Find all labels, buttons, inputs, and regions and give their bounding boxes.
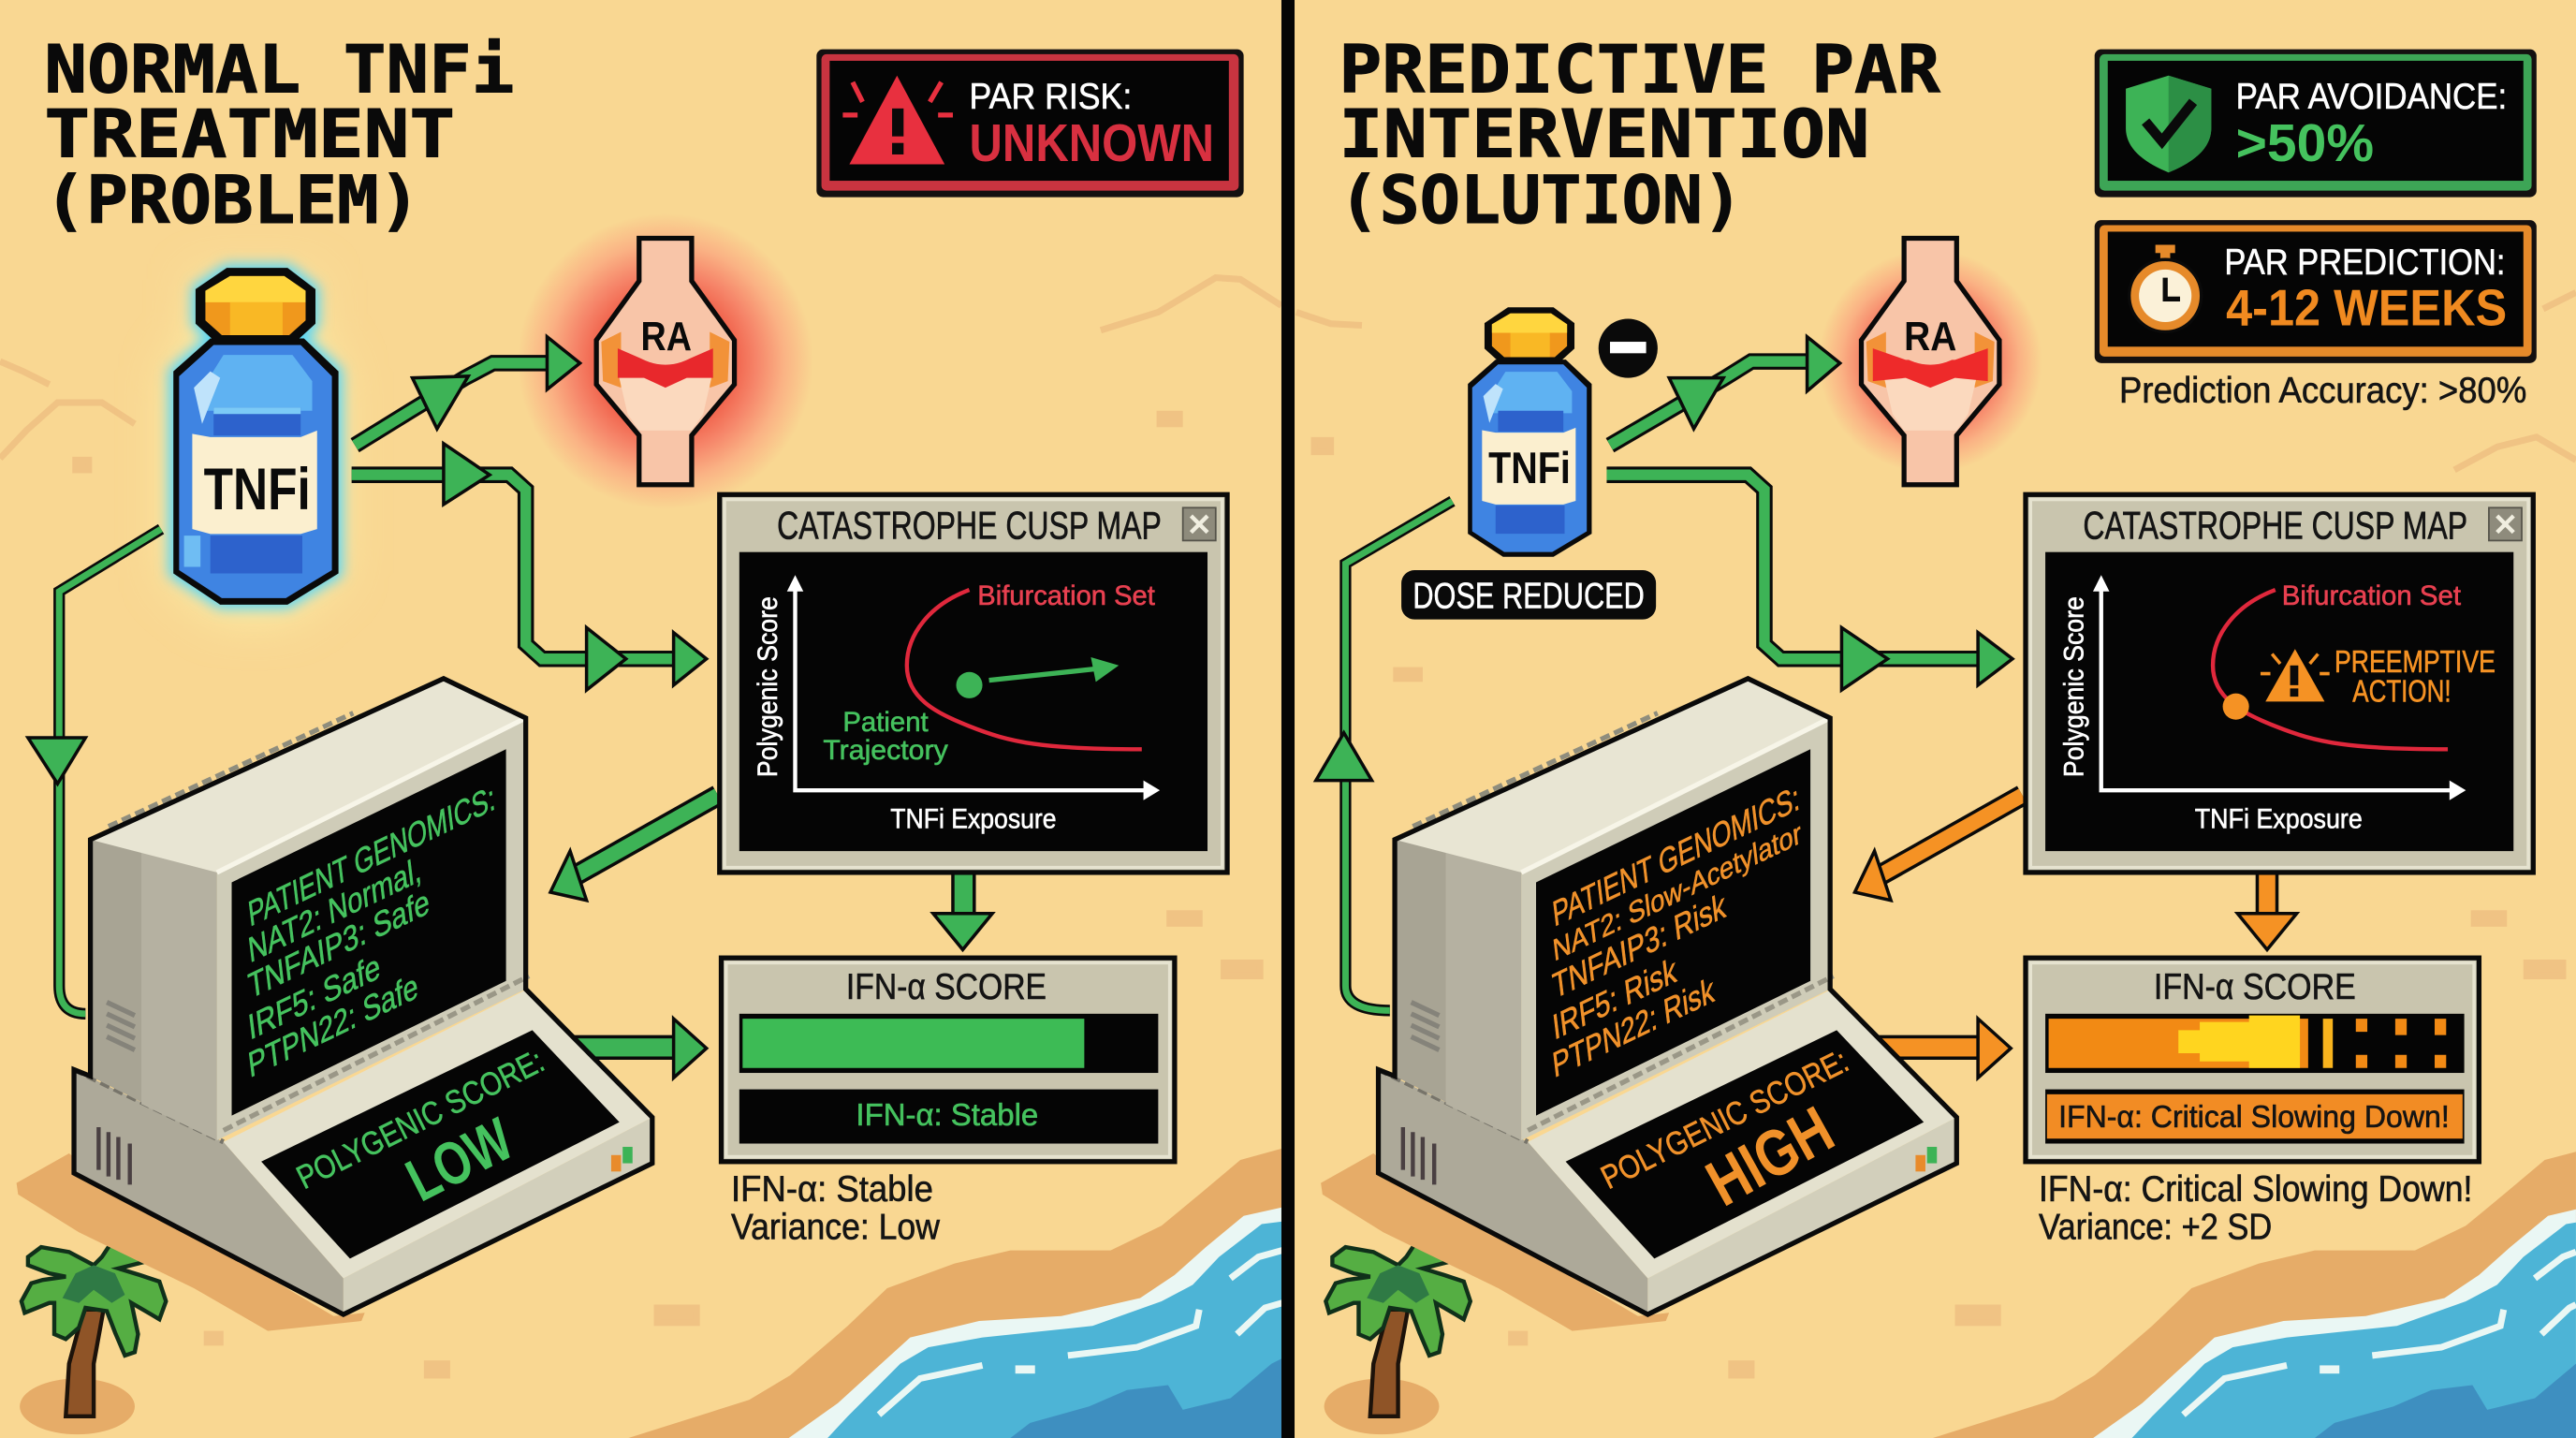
chart: cusp map: Polygenic Score	[2058, 596, 2089, 777]
icon: shield check	[2126, 76, 2211, 172]
icon: TNFi bottle	[169, 268, 339, 616]
genomics screen	[1536, 749, 1810, 1116]
callout: preemptive action	[2334, 645, 2496, 709]
genomics screen: TNFAIP3: Safe	[246, 882, 432, 1007]
arrow: computer to IFN score	[575, 1019, 707, 1078]
computer tower	[74, 679, 652, 1314]
genomics screen: PATIENT GENOMICS:	[1550, 778, 1802, 934]
title: predictive PAR intervention: PREDICTIVE PAR	[1339, 31, 1941, 108]
title: normal TNFi treatment	[44, 31, 514, 239]
label: RA: RA	[1904, 314, 1956, 360]
chart: cusp map	[2058, 575, 2496, 835]
icon: reduced TNFi bottle	[1468, 307, 1591, 557]
label: TNFi: TNFi	[204, 457, 311, 522]
caption: stable variance low: IFN-α: Stable	[731, 1169, 933, 1210]
caption: critical slowing, variance +2 SD	[2039, 1169, 2472, 1247]
arrow: cusp map to IFN score	[933, 873, 992, 949]
label pill: dose reduced: DOSE REDUCED	[1412, 576, 1645, 616]
status: critical slowing down: IFN-α: Critical Slowing Down!	[2058, 1100, 2450, 1135]
arrow: cusp map to computer	[550, 795, 718, 901]
genomics screen: NAT2: Slow-Acetylator	[1551, 816, 1803, 968]
label pill: dose reduced	[1401, 570, 1656, 620]
window title: CATASTROPHE CUSP MAP	[777, 504, 1162, 548]
computer: high-risk genomics	[1321, 679, 1956, 1331]
arrow: computer to IFN score, orange	[1880, 1019, 2011, 1078]
polygenic score display	[261, 1030, 620, 1258]
chart: cusp map: Polygenic Score	[753, 596, 783, 777]
icon: warning triangle	[842, 76, 953, 165]
label: PAR avoidance: PAR AVOIDANCE:	[2236, 77, 2507, 117]
caption: critical slowing, variance +2 SD: IFN-α: Critical Slowing Down!	[2039, 1169, 2472, 1210]
divider between panels	[1281, 0, 1295, 1438]
callout: preemptive action: PREEMPTIVE	[2334, 645, 2496, 680]
bar: IFN score	[739, 1014, 1158, 1073]
badge: PAR risk unknown	[816, 50, 1244, 198]
icon: warning triangle	[2261, 649, 2330, 701]
chart: cusp map: Trajectory	[823, 735, 948, 766]
title: predictive PAR intervention: (SOLUTION)	[1339, 162, 1743, 239]
shoreline right	[1928, 1152, 2576, 1438]
window title: IFN-α SCORE	[846, 967, 1046, 1007]
genomics screen: PTPN22: Safe	[246, 966, 420, 1086]
shoreline left	[624, 1147, 1288, 1438]
icon: RA joint	[518, 213, 813, 509]
arrow: computer feedback to bottle	[28, 529, 161, 1014]
chart: cusp map: Bifurcation Set	[2282, 580, 2462, 611]
close button	[1183, 507, 1216, 540]
caption: stable variance low: Variance: Low	[731, 1207, 940, 1247]
value: unknown: UNKNOWN	[970, 113, 1214, 172]
genomics screen: TNFAIP3: Risk	[1550, 886, 1728, 1007]
chart: cusp map: Patient	[842, 707, 929, 738]
title: predictive PAR intervention	[1339, 31, 1941, 239]
callout: preemptive action: ACTION!	[2352, 674, 2452, 709]
polygenic score display: LOW	[396, 1104, 523, 1214]
polygenic score display	[1566, 1030, 1924, 1258]
sand dunes and specks	[0, 278, 2576, 1375]
label: TNFi: TNFi	[1488, 444, 1571, 493]
title: predictive PAR intervention: INTERVENTION	[1339, 96, 1869, 173]
chart: cusp map: TNFi Exposure	[2195, 804, 2363, 835]
chart: cusp map	[753, 575, 1160, 835]
chart: cusp map: TNFi Exposure	[890, 804, 1057, 835]
polygenic score display: POLYGENIC SCORE:	[291, 1043, 549, 1196]
label: PAR risk: PAR RISK:	[970, 77, 1132, 117]
computer base	[74, 990, 652, 1314]
chart: cusp map: Bifurcation Set	[977, 580, 1156, 611]
polygenic score display: POLYGENIC SCORE:	[1595, 1043, 1854, 1196]
arrow: cusp map to IFN score, orange	[2237, 873, 2297, 949]
computer: patient genomics	[17, 679, 652, 1331]
value: over 50 percent: >50%	[2236, 113, 2374, 172]
arrow: reduced bottle to cusp map	[1606, 475, 2012, 690]
genomics screen: PTPN22: Risk	[1550, 970, 1717, 1086]
genomics screen: IRF5: Safe	[246, 946, 382, 1048]
genomics screen	[232, 749, 506, 1116]
panel: predictive PAR intervention (solution)	[1316, 31, 2537, 1434]
arrow: computer to reduced bottle	[1316, 501, 1453, 1010]
status: critical slowing down	[2045, 1090, 2465, 1143]
label: PAR prediction: PAR PREDICTION:	[2224, 242, 2505, 283]
panel: normal TNFi treatment (problem)	[17, 31, 1244, 1434]
caption: prediction accuracy: Prediction Accuracy: >80%	[2119, 371, 2526, 411]
arrow: bottle to cusp map	[352, 444, 707, 690]
label: RA: RA	[641, 314, 692, 360]
status: stable	[739, 1090, 1158, 1143]
icon: RA joint with reduced inflammation	[1819, 238, 2042, 485]
window: IFN-alpha score stable	[722, 958, 1175, 1162]
computer tower	[1379, 679, 1956, 1314]
title: normal TNFi treatment: NORMAL TNFi	[44, 31, 514, 108]
status: stable: IFN-α: Stable	[856, 1098, 1038, 1133]
icon: minus sign	[1599, 318, 1658, 378]
icon: palm tree	[20, 1242, 166, 1434]
arrow: bottle to RA joint	[355, 337, 580, 446]
computer base	[1379, 990, 1956, 1314]
window: catastrophe cusp map, solution	[2026, 494, 2533, 873]
window title: CATASTROPHE CUSP MAP	[2083, 504, 2467, 548]
genomics screen: NAT2: Normal,	[246, 850, 423, 971]
window title: IFN-α SCORE	[2154, 967, 2356, 1007]
arrow: reduced bottle to RA joint	[1610, 337, 1840, 446]
genomics screen: PATIENT GENOMICS:	[246, 778, 497, 934]
icon: palm tree	[1325, 1242, 1471, 1434]
arrow: cusp map to computer, orange	[1854, 795, 2022, 901]
bar: unstable IFN score	[2045, 1014, 2465, 1073]
polygenic score display: HIGH	[1694, 1092, 1845, 1220]
badge: PAR avoidance	[2095, 50, 2537, 198]
icon: stopwatch	[2130, 244, 2202, 332]
window: catastrophe cusp map	[720, 494, 1227, 873]
badge: PAR prediction	[2095, 220, 2537, 363]
window: IFN-alpha score critical	[2026, 958, 2479, 1162]
caption: stable variance low	[731, 1169, 940, 1247]
title: normal TNFi treatment: TREATMENT	[44, 96, 455, 173]
genomics screen: IRF5: Risk	[1550, 950, 1678, 1048]
close button	[2489, 507, 2522, 540]
value: 4-12 weeks: 4-12 WEEKS	[2226, 279, 2507, 336]
caption: critical slowing, variance +2 SD: Variance: +2 SD	[2039, 1207, 2272, 1247]
title: normal TNFi treatment: (PROBLEM)	[44, 162, 420, 239]
